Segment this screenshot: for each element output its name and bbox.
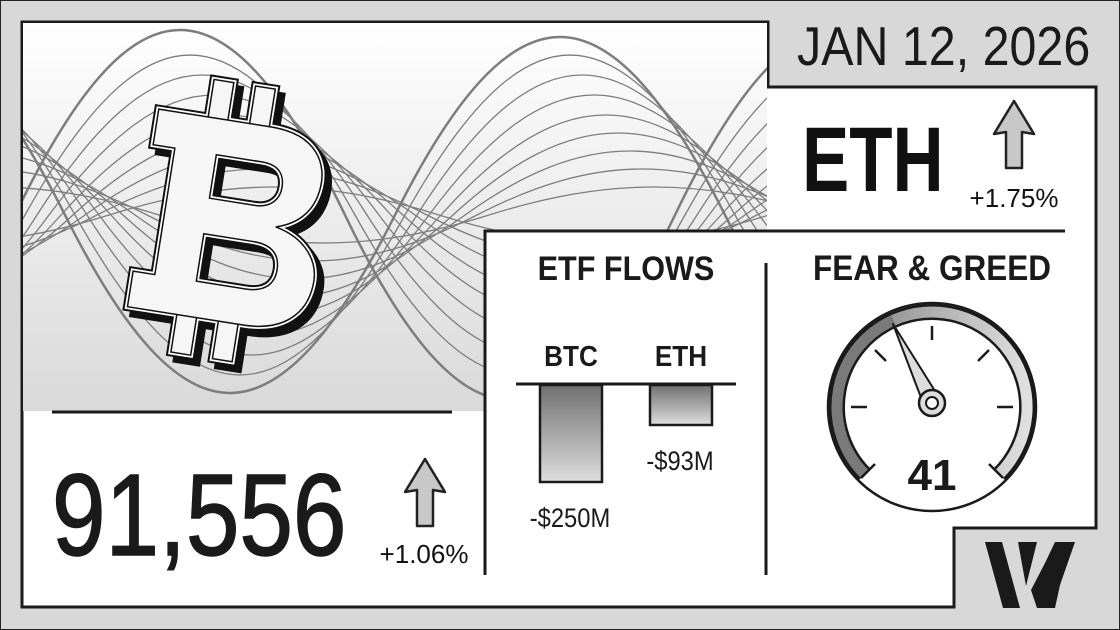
btc change: +1.06% <box>380 539 468 569</box>
panel: ETF flows and fear greed <box>485 231 1094 605</box>
gauge band <box>837 320 893 474</box>
panel: ETH price <box>802 101 1058 213</box>
waves pattern <box>23 28 767 396</box>
btc price value: 91,556 <box>52 451 346 580</box>
bar chart: ETF flows: -$93M <box>646 447 714 476</box>
fear and greed heading: FEAR & GREED <box>813 250 1051 288</box>
eth label: ETH <box>802 109 944 211</box>
bar chart: ETF flows: ETH <box>655 340 707 372</box>
ETF flows heading: ETF FLOWS <box>538 250 714 287</box>
icon: W logo <box>985 542 1075 608</box>
bar chart: ETF flows <box>516 340 736 533</box>
needle <box>893 324 940 408</box>
bar chart: ETF flows: BTC <box>544 340 598 372</box>
gauge: fear and greed <box>828 303 1036 511</box>
gauge value: 41 <box>908 451 956 500</box>
icon: bitcoin symbol <box>122 74 332 374</box>
BTC price block <box>52 451 468 580</box>
icon: up arrow btc <box>405 459 445 526</box>
eth change: +1.75% <box>970 183 1058 213</box>
bar chart: ETF flows: -$250M <box>530 504 610 533</box>
icon: up arrow eth <box>994 101 1034 168</box>
hero image: bitcoin with waves <box>23 23 767 411</box>
date: JAN 12, 2026 <box>797 15 1090 77</box>
